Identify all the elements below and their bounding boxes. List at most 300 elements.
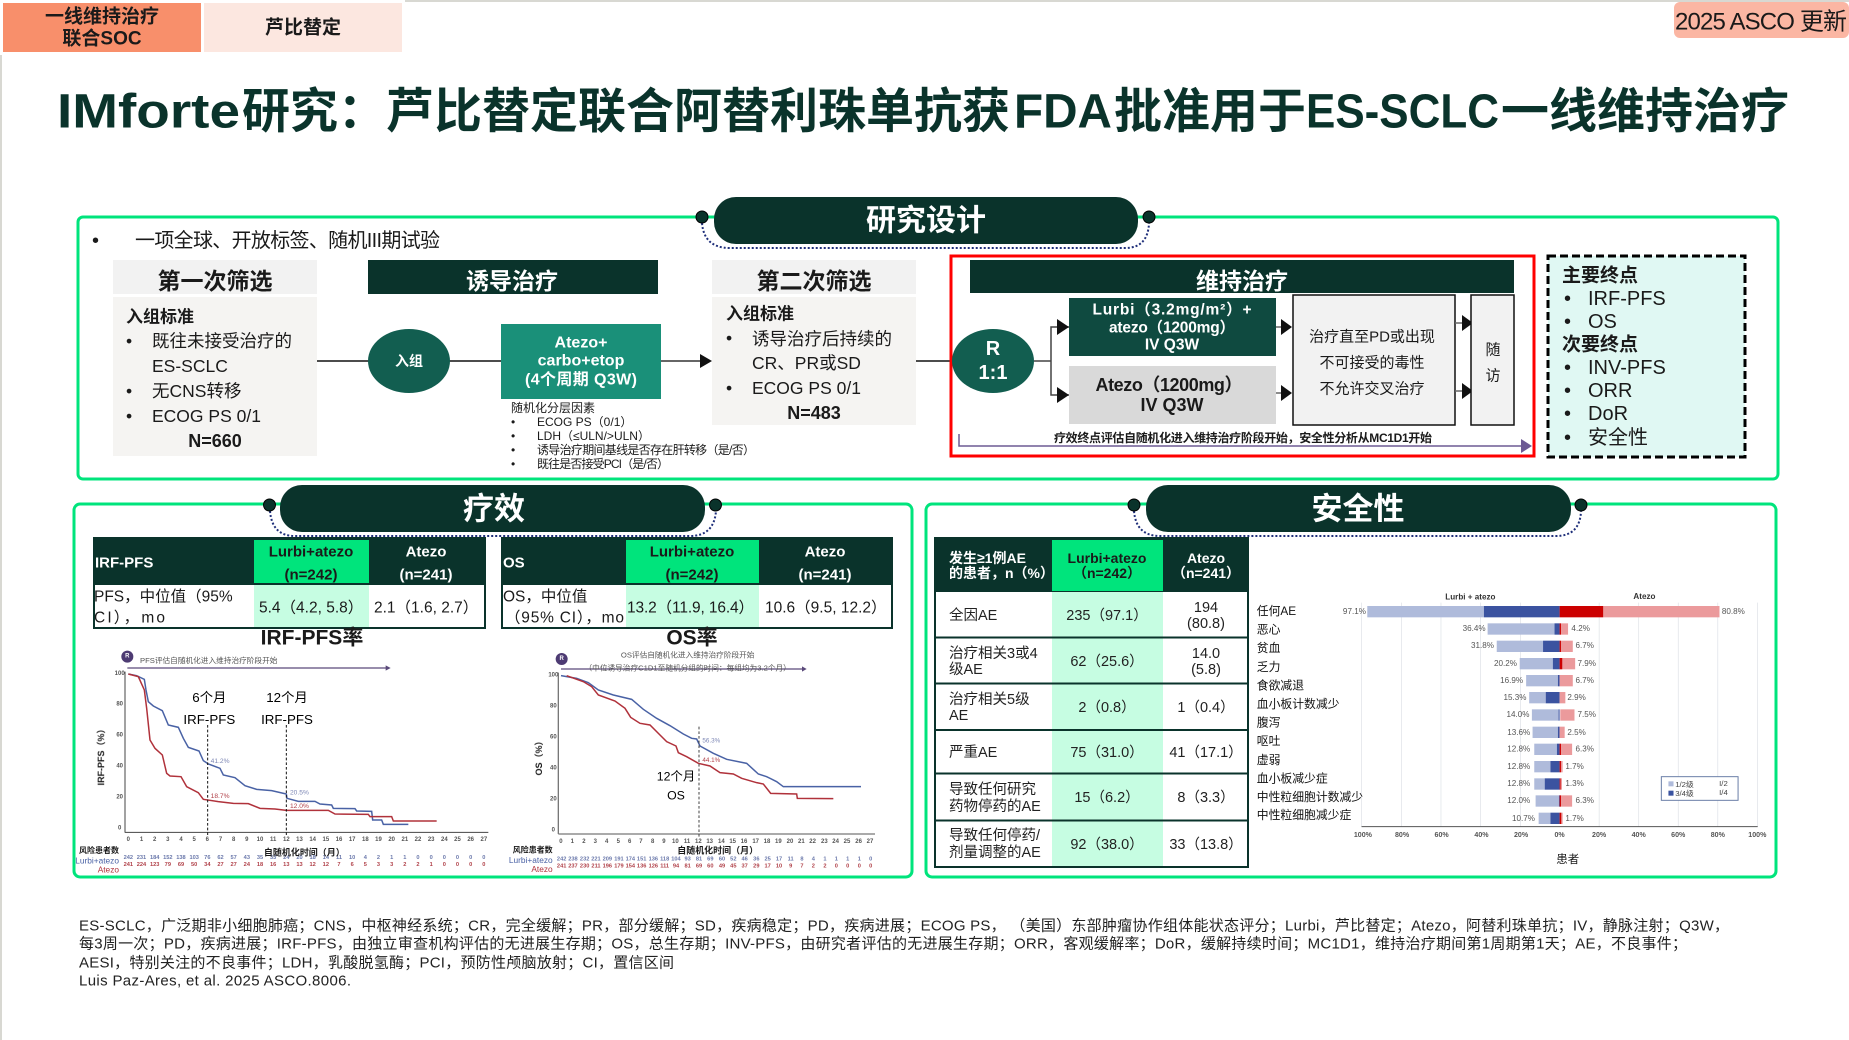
panel: endpoints: ORR (1588, 380, 1632, 402)
legend: grades: I/2 (1719, 779, 1728, 788)
chart: IRF-PFS Kaplan-Meier: 40 (116, 764, 124, 770)
chart: adverse event butterfly bars: 2.5% (1567, 728, 1586, 737)
block: lurbi plus atezo arm (1069, 298, 1276, 356)
text: stratification factors: • (511, 443, 515, 457)
chart: IRF-PFS Kaplan-Meier: 14 (323, 855, 330, 861)
chart: OS Kaplan-Meier: 自随机化时间（月） (677, 844, 758, 855)
block: treatment until progression: 不允许交叉治疗 (1319, 380, 1425, 398)
chart: OS Kaplan-Meier: 0 (869, 863, 872, 869)
table: adverse events: 194 (1194, 600, 1218, 616)
table: IRF-PFS: (n=242) (285, 566, 337, 584)
chart: OS Kaplan-Meier: 49 (719, 863, 725, 869)
heading: study design (714, 197, 1138, 244)
chart: IRF-PFS Kaplan-Meier: 22 (415, 837, 422, 843)
title: 批准用于 (1114, 86, 1306, 138)
chart: IRF-PFS Kaplan-Meier: 76 (204, 855, 210, 861)
chart: OS Kaplan-Meier: 3 (594, 839, 598, 845)
chart: OS Kaplan-Meier: 0 (552, 828, 556, 834)
chart: IRF-PFS Kaplan-Meier: 41.2% (211, 758, 230, 765)
panel: endpoints: 主要终点 (1562, 264, 1638, 286)
chart: adverse event butterfly bars: 7.5% (1578, 710, 1596, 719)
chart: OS Kaplan-Meier: 237 (568, 863, 578, 869)
chart: IRF-PFS Kaplan-Meier: R (125, 654, 130, 660)
chart: IRF-PFS Kaplan-Meier: 26 (467, 837, 475, 843)
chart: IRF-PFS Kaplan-Meier: 27 (231, 862, 237, 868)
panel: endpoints: • (1564, 311, 1571, 333)
chart: OS Kaplan-Meier: 4 (605, 839, 609, 845)
chart: OS Kaplan-Meier: 5 (617, 839, 621, 845)
chart: OS Kaplan-Meier: 20 (787, 839, 794, 845)
chart: adverse event butterfly bars: 12.8% (1507, 779, 1530, 788)
chart: IRF-PFS Kaplan-Meier: 0 (469, 855, 472, 861)
heading: safety (1146, 485, 1571, 532)
chart: OS Kaplan-Meier: 1 (571, 839, 575, 845)
block: first screening: 第一次筛选 (158, 268, 272, 294)
chart: adverse event butterfly bars: 6.7% (1575, 676, 1594, 685)
chart: adverse event butterfly bars: 12.8% (1507, 745, 1530, 753)
chart: IRF-PFS Kaplan-Meier: 18 (257, 862, 263, 868)
chart: adverse event butterfly bars: 呕吐 (1257, 735, 1281, 748)
chart: OS Kaplan-Meier: 0 (559, 839, 563, 845)
chart: IRF-PFS Kaplan-Meier: 18.7% (211, 793, 230, 800)
block: induction heading: 诱导治疗 (466, 268, 558, 294)
chart: IRF-PFS Kaplan-Meier: 7 (337, 862, 341, 868)
chart: adverse event butterfly bars (1257, 592, 1767, 866)
chart: adverse event butterfly bars: 100% (1354, 832, 1373, 839)
block: second screening (712, 260, 916, 425)
node: randomisation (952, 329, 1034, 393)
chart: OS Kaplan-Meier: 118 (660, 856, 669, 862)
chart: IRF-PFS Kaplan-Meier: 241 (124, 862, 133, 868)
chart: IRF-PFS Kaplan-Meier: 0 (416, 855, 420, 861)
table: OS: 13.2（11.9, 16.4） (627, 600, 754, 616)
chart: adverse event butterfly bars: 97.1% (1343, 607, 1366, 616)
chart: adverse event butterfly bars: 36.4% (1463, 624, 1486, 633)
block: first screening: 既往未接受治疗的 (152, 331, 292, 351)
table: adverse events: Lurbi+atezo (1068, 550, 1146, 566)
chart: OS Kaplan-Meier: 174 (626, 856, 636, 862)
table: adverse events: 41（17.1） (1169, 744, 1243, 761)
chart: IRF-PFS Kaplan-Meier: 27 (217, 862, 224, 868)
chart: OS Kaplan-Meier: 11 (788, 856, 794, 862)
chart: IRF-PFS Kaplan-Meier: 20.5% (290, 789, 309, 796)
chart: IRF-PFS Kaplan-Meier: PFS评估自随机化进入维持治疗阶段开始 (140, 655, 278, 665)
chart: IRF-PFS Kaplan-Meier: 13 (283, 862, 289, 868)
chart: IRF-PFS Kaplan-Meier: 12.0% (290, 803, 309, 810)
chart: IRF-PFS Kaplan-Meier: Atezo (98, 864, 119, 874)
table: adverse events: Atezo (1187, 550, 1225, 566)
chart: IRF-PFS Kaplan-Meier: IRF-PFS (261, 712, 313, 727)
chart: IRF-PFS Kaplan-Meier: 3 (390, 862, 393, 868)
block: follow-up (1471, 295, 1514, 425)
node: enrolment (368, 329, 450, 393)
chart: OS Kaplan-Meier: 18 (764, 839, 771, 845)
chart: OS Kaplan-Meier: （中位诱导治疗C1D1至随机分组的时间：每组均为3.2个月） (585, 662, 791, 672)
chart: IRF-PFS Kaplan-Meier: IRF-PFS（%） (96, 725, 106, 785)
chart: IRF-PFS Kaplan-Meier: 10 (349, 855, 355, 861)
table: adverse events: 1（0.4） (1177, 699, 1235, 716)
chart: adverse event butterfly bars: 40% (1474, 832, 1489, 839)
block: second screening: • (726, 378, 732, 398)
chart: IRF-PFS Kaplan-Meier: 0 (430, 855, 433, 861)
heading: study design: 研究设计 (866, 204, 986, 238)
chart: OS Kaplan-Meier: 12 (695, 839, 702, 845)
table: OS (502, 538, 892, 628)
footnotes: ES-SCLC，广泛期非小细胞肺癌；CNS，中枢神经系统；CR，完全缓解；PR，部分缓解；SD，疾病稳定；PD，疾病进展；ECOG PS， （美国）东部肿瘤协作组体能状态评分；Lurbi，芦比替定；Atezo，阿替利珠单抗；IV，静脉注射；Q3W， (79, 916, 1729, 934)
chart: IRF-PFS Kaplan-Meier: 100 (115, 671, 125, 677)
chart: adverse event butterfly bars: 1.3% (1565, 779, 1584, 788)
chart: IRF-PFS Kaplan-Meier: 138 (176, 855, 186, 861)
chart: OS Kaplan-Meier: 151 (637, 856, 646, 862)
chart: OS Kaplan-Meier: 26 (855, 839, 863, 845)
block: atezo arm: Atezo（1200mg） (1096, 375, 1242, 395)
chart: IRF-PFS Kaplan-Meier: 24 (441, 837, 448, 843)
chart: adverse event butterfly bars: 中性粒细胞计数减少 (1257, 790, 1363, 804)
tab: first-line maintenance with SOC: 联合SOC (62, 28, 142, 50)
panel: endpoints: 安全性 (1588, 426, 1648, 449)
arrows: randomisation branches (1034, 319, 1069, 403)
table: OS: OS (503, 554, 525, 572)
chart: IRF-PFS Kaplan-Meier: 13 (296, 862, 303, 868)
chart: IRF-PFS Kaplan-Meier: 3 (377, 862, 380, 868)
chart: OS Kaplan-Meier: 241 (557, 863, 566, 869)
chart: adverse event butterfly bars: 中性粒细胞减少症 (1257, 808, 1352, 822)
chart: IRF-PFS Kaplan-Meier: 18 (362, 837, 369, 843)
tab: lurbinectedin (204, 3, 402, 52)
chart: IRF-PFS Kaplan-Meier: 16 (336, 837, 343, 843)
block: second screening: 第二次筛选 (756, 268, 872, 294)
chart: OS Kaplan-Meier: 60 (719, 856, 725, 862)
chart: IRF-PFS Kaplan-Meier: 自随机化时间（月） (264, 847, 345, 858)
chart: IRF-PFS Kaplan-Meier: 80 (116, 702, 124, 708)
chart: IRF-PFS Kaplan-Meier: 14 (309, 837, 317, 843)
chart: OS Kaplan-Meier: 7 (639, 839, 643, 845)
chart: adverse event butterfly bars: 20% (1514, 832, 1529, 839)
table: OS: Atezo (805, 544, 845, 560)
chart: IRF-PFS Kaplan-Meier: 25 (454, 837, 461, 843)
chart: OS Kaplan-Meier: 12个月 (657, 769, 695, 783)
text: stratification factors: 既往是否接受PCI（是/否） (537, 456, 669, 471)
chart: IRF-PFS Kaplan-Meier: 2 (403, 862, 406, 868)
text: study description: 一项全球、开放标签、随机III期试验 (135, 229, 440, 252)
chart: OS Kaplan-Meier: 24 (832, 839, 840, 845)
block: first screening: ECOG PS 0/1 (152, 406, 261, 426)
chart: OS Kaplan-Meier: 4 (812, 856, 816, 862)
footnotes: 每3周一次；PD，疾病进展；IRF-PFS，由独立审查机构评估的无进展生存期；OS，总生存期；INV-PFS，由研究者评估的无进展生存期；ORR，客观缓解率；DoR，缓解持续时间；MC1D1，维持治疗期间第1周期第1天；AE，不良事件； (79, 934, 1687, 952)
chart: adverse event butterfly bars: 血小板计数减少 (1257, 697, 1340, 711)
block: first screening: N=660 (188, 431, 242, 451)
block: induction heading (368, 260, 658, 294)
block: first screening (113, 260, 317, 456)
chart: IRF-PFS Kaplan-Meier: 27 (480, 837, 488, 843)
chart: IRF-PFS Kaplan-Meier (75, 651, 488, 874)
chart: IRF-PFS Kaplan-Meier: 123 (150, 862, 159, 868)
flow line: enrolment (315, 360, 501, 362)
block: first screening: 入组标准 (126, 308, 194, 326)
tab: lurbinectedin: 芦比替定 (265, 16, 341, 38)
panel: efficacy (74, 485, 912, 877)
chart: IRF-PFS Kaplan-Meier: 2 (377, 855, 380, 861)
table: adverse events: 严重AE (949, 744, 998, 761)
block: induction regimen: Atezo+ (555, 334, 607, 352)
table: adverse events: 治疗相关5级 (949, 691, 1030, 708)
chart: IRF-PFS Kaplan-Meier: 24 (244, 862, 251, 868)
panel: safety (926, 485, 1776, 877)
chart: IRF-PFS Kaplan-Meier: 152 (163, 855, 173, 861)
chart: IRF-PFS Kaplan-Meier: 0 (456, 862, 459, 868)
chart: IRF-PFS Kaplan-Meier: 12个月 (266, 690, 308, 705)
chart: OS Kaplan-Meier: 16 (741, 839, 748, 845)
panel: endpoints: OS (1588, 311, 1617, 333)
chart: IRF-PFS Kaplan-Meier: 0 (127, 837, 131, 843)
chart: OS Kaplan-Meier: 14 (718, 839, 725, 845)
table: OS: （95% CI），mo (505, 610, 624, 626)
table: IRF-PFS: 2.1（1.6, 2.7） (374, 600, 478, 616)
chart: adverse event butterfly bars: 20.2% (1494, 659, 1517, 668)
chart: OS Kaplan-Meier: 23 (821, 839, 828, 845)
chart: IRF-PFS Kaplan-Meier: 5 (364, 862, 367, 868)
block: induction regimen: carbo+etop (538, 352, 625, 370)
chart: OS Kaplan-Meier: 10 (672, 839, 679, 845)
chart: IRF-PFS Kaplan-Meier: 9 (245, 837, 249, 843)
chart: OS Kaplan-Meier: 154 (626, 863, 636, 869)
chart: OS Kaplan-Meier: 36 (753, 856, 759, 862)
panel: endpoints: • (1564, 357, 1571, 379)
chart: OS Kaplan-Meier: 232 (580, 856, 589, 862)
chart: IRF-PFS Kaplan-Meier: 231 (137, 855, 146, 861)
chart: OS Kaplan-Meier: OS评估自随机化进入维持治疗阶段开始 (621, 649, 755, 659)
chart: IRF-PFS Kaplan-Meier: 23 (428, 837, 435, 843)
chart: IRF-PFS Kaplan-Meier: 3 (166, 837, 170, 843)
panel: study design (78, 197, 1778, 479)
chart: IRF-PFS Kaplan-Meier: 224 (137, 862, 147, 868)
tab: first-line maintenance with SOC (3, 3, 201, 52)
table: adverse events: 全因AE (949, 606, 998, 624)
chart: OS Kaplan-Meier: 9 (789, 863, 792, 869)
chart: OS Kaplan-Meier: 8 (800, 856, 804, 862)
block: treatment until progression: 治疗直至PD或出现 (1309, 328, 1435, 346)
chart: IRF-PFS Kaplan-Meier: 7 (219, 837, 223, 843)
chart: IRF-PFS Kaplan-Meier: 4 (364, 855, 368, 861)
chart: OS Kaplan-Meier: 93 (685, 856, 691, 862)
chart: IRF-PFS Kaplan-Meier: 10 (257, 837, 264, 843)
table: adverse events: 8（3.3） (1177, 789, 1235, 806)
chart: OS Kaplan-Meier: 242 (557, 856, 566, 862)
table: IRF-PFS: Lurbi+atezo (269, 544, 353, 560)
block: lurbi plus atezo arm: IV Q3W (1145, 336, 1199, 354)
chart: IRF-PFS Kaplan-Meier: 34 (204, 862, 211, 868)
table: adverse events: 62（25.6） (1070, 653, 1144, 670)
chart: IRF-PFS Kaplan-Meier: 1 (390, 855, 393, 861)
chart: OS Kaplan-Meier: 1 (823, 856, 827, 862)
chart: adverse event butterfly bars: 血小板减少症 (1257, 772, 1328, 785)
chart: OS Kaplan-Meier: 17 (776, 856, 782, 862)
node: randomisation: R (986, 338, 1001, 360)
table: adverse events: (80.8) (1187, 616, 1225, 632)
table: adverse events: 级AE (949, 661, 983, 678)
table: IRF-PFS: (n=241) (400, 566, 452, 584)
chart: OS Kaplan-Meier: 0 (869, 856, 872, 862)
chart: adverse event butterfly bars: 虚弱 (1257, 754, 1280, 767)
block: first screening: 无CNS转移 (152, 381, 241, 401)
chart: OS Kaplan-Meier: 0 (858, 863, 861, 869)
legend: grades (1661, 777, 1738, 800)
chart: OS Kaplan-Meier: 56.3% (702, 737, 721, 744)
title: ES-SCLC (1306, 86, 1499, 138)
chart: adverse event butterfly bars: 13.6% (1507, 728, 1530, 737)
chart: OS Kaplan-Meier: 211 (591, 863, 601, 869)
chart: OS Kaplan-Meier: 81 (685, 863, 691, 869)
chart: OS Kaplan-Meier: 191 (614, 856, 624, 862)
heading: safety: 安全性 (1312, 492, 1404, 526)
chart: IRF-PFS Kaplan-Meier: 20 (296, 855, 303, 861)
block: second screening: CR、PR或SD (752, 353, 861, 373)
chart: adverse event butterfly bars: 恶心 (1257, 624, 1281, 636)
chart: OS Kaplan-Meier (509, 649, 875, 874)
heading: OS rate: OS率 (666, 626, 718, 650)
chart: OS Kaplan-Meier: 179 (614, 863, 624, 869)
chart: adverse event butterfly bars: 乏力 (1257, 661, 1280, 674)
chart: adverse event butterfly bars: 60% (1671, 832, 1686, 839)
chart: adverse event butterfly bars: 食欲减退 (1257, 679, 1304, 692)
chart: IRF-PFS Kaplan-Meier: 13 (296, 837, 303, 843)
chart: IRF-PFS Kaplan-Meier: 风险患者数 (79, 845, 119, 855)
chart: OS Kaplan-Meier: 25 (765, 856, 771, 862)
table: adverse events: 的患者，n（%） (949, 565, 1054, 581)
chart: OS Kaplan-Meier: 81 (696, 856, 702, 862)
chart: IRF-PFS Kaplan-Meier: 33 (270, 855, 276, 861)
arrows: treatment to follow-up (1455, 315, 1473, 399)
chart: IRF-PFS Kaplan-Meier: 15 (322, 837, 330, 843)
panel: endpoints (1548, 256, 1745, 457)
block: lurbi plus atezo arm: Lurbi（3.2mg/m²）+ (1092, 302, 1252, 318)
table: adverse events: 导致任何停药/ (949, 827, 1041, 844)
text: stratification factors: 诱导治疗期间基线是否存在肝转移（是/否） (537, 442, 755, 457)
chart: OS Kaplan-Meier: OS (667, 789, 685, 803)
chart: OS Kaplan-Meier: 9 (662, 839, 666, 845)
badge: 2025 ASCO update: 2025 ASCO 更新 (1675, 8, 1847, 36)
chart: adverse event butterfly bars: 1.7% (1565, 762, 1584, 771)
chart: OS Kaplan-Meier: 126 (649, 863, 658, 869)
table: OS: (n=242) (666, 566, 718, 584)
block: first screening: • (126, 381, 132, 401)
chart: OS Kaplan-Meier: 1 (835, 856, 838, 862)
node: enrolment: 入组 (395, 353, 423, 369)
title: 研究：芦比替定联合阿替利珠单抗获 (242, 86, 1010, 138)
chart: OS Kaplan-Meier: 2 (823, 863, 827, 869)
chart: IRF-PFS Kaplan-Meier: 1 (430, 862, 433, 868)
chart: IRF-PFS Kaplan-Meier: 0 (456, 855, 459, 861)
chart: adverse event butterfly bars: 1.7% (1565, 814, 1584, 823)
chart: IRF-PFS Kaplan-Meier: 2 (416, 862, 420, 868)
chart: OS Kaplan-Meier: 136 (649, 856, 658, 862)
text: stratification factors: 随机化分层因素 (511, 400, 595, 415)
chart: OS Kaplan-Meier: 221 (591, 856, 601, 862)
table: adverse events: 14.0 (1192, 646, 1220, 662)
chart: OS Kaplan-Meier: R (560, 656, 565, 662)
chart: IRF-PFS Kaplan-Meier: 11 (336, 855, 342, 861)
table: adverse events: 药物停药的AE (949, 798, 1041, 815)
block: first screening: • (126, 331, 132, 351)
chart: OS Kaplan-Meier: 1 (858, 856, 861, 862)
heading: IRF-PFS rate: IRF-PFS率 (261, 626, 363, 650)
panel: endpoints: IRF-PFS (1588, 288, 1666, 310)
chart: adverse event butterfly bars: 12.8% (1507, 762, 1530, 771)
chart: OS Kaplan-Meier: 60 (707, 863, 713, 869)
text: stratification factors: • (511, 457, 515, 471)
chart: OS Kaplan-Meier: Lurbi+atezo (509, 855, 553, 865)
table: OS: OS，中位值 (503, 588, 587, 606)
chart: IRF-PFS Kaplan-Meier: 0 (469, 862, 472, 868)
heading: maintenance therapy: 维持治疗 (1196, 268, 1288, 294)
heading: maintenance therapy (970, 260, 1514, 294)
chart: OS Kaplan-Meier: 7 (800, 863, 804, 869)
chart: adverse event butterfly bars: 100% (1748, 832, 1767, 839)
chart: OS Kaplan-Meier: 0 (846, 863, 849, 869)
chart: OS Kaplan-Meier: 52 (730, 856, 736, 862)
chart: IRF-PFS Kaplan-Meier: 12 (310, 862, 316, 868)
chart: IRF-PFS Kaplan-Meier: 103 (189, 855, 199, 861)
chart: OS Kaplan-Meier: Atezo (531, 864, 553, 874)
title: 一线维持治疗 (1501, 86, 1789, 138)
chart: OS Kaplan-Meier: 0 (835, 863, 838, 869)
table: IRF-PFS: 5.4（4.2, 5.8） (259, 600, 363, 616)
table: adverse events: 235（97.1） (1066, 607, 1148, 624)
chart: OS Kaplan-Meier: 15 (729, 839, 737, 845)
table: IRF-PFS: Atezo (406, 544, 446, 560)
chart: adverse event butterfly bars: 7.9% (1578, 659, 1596, 668)
table: adverse events: 15（6.2） (1074, 789, 1140, 806)
chart: adverse event butterfly bars: 10.7% (1512, 814, 1535, 823)
block: second screening: ECOG PS 0/1 (752, 378, 861, 398)
chart: IRF-PFS Kaplan-Meier: 60 (116, 733, 124, 739)
chart: OS Kaplan-Meier: 6 (628, 839, 632, 845)
panel: endpoints: • (1564, 288, 1571, 310)
chart: adverse event butterfly bars: 患者 (1556, 853, 1579, 866)
heading: efficacy (280, 485, 705, 532)
chart: adverse event butterfly bars: 2.9% (1567, 693, 1586, 702)
text: stratification factors (511, 400, 755, 471)
chart: adverse event butterfly bars: 14.0% (1507, 710, 1530, 719)
text: stratification factors: ECOG PS（0/1） (537, 415, 632, 429)
chart: IRF-PFS Kaplan-Meier: 18 (310, 855, 316, 861)
chart: IRF-PFS Kaplan-Meier: 0 (443, 855, 446, 861)
chart: IRF-PFS Kaplan-Meier: 242 (124, 855, 133, 861)
block: induction regimen (501, 324, 661, 399)
chart: IRF-PFS Kaplan-Meier: 0 (443, 862, 446, 868)
table: adverse events: （n=241） (1172, 565, 1240, 581)
chart: IRF-PFS Kaplan-Meier: 43 (244, 855, 250, 861)
chart: IRF-PFS Kaplan-Meier: 12 (283, 837, 290, 843)
table: adverse events: 剂量调整的AE (949, 844, 1041, 861)
tab: first-line maintenance with SOC: 一线维持治疗 (45, 6, 159, 28)
table: adverse events: （n=242） (1073, 565, 1141, 581)
panel: endpoints: • (1564, 380, 1571, 402)
block: first screening: • (126, 406, 132, 426)
text: stratification factors: • (511, 415, 515, 429)
chart: adverse event butterfly bars: 15.3% (1503, 693, 1526, 702)
chart: adverse event butterfly bars: 4.2% (1571, 624, 1590, 633)
chart: OS Kaplan-Meier: 19 (775, 839, 782, 845)
arrow: induction to second screening (661, 354, 712, 368)
table: IRF-PFS: PFS，中位值（95% (94, 588, 233, 606)
chart: IRF-PFS Kaplan-Meier: 5 (192, 837, 196, 843)
table: OS: 10.6（9.5, 12.2） (765, 600, 886, 616)
chart: OS Kaplan-Meier: 230 (580, 863, 589, 869)
chart: IRF-PFS Kaplan-Meier: 62 (217, 855, 224, 861)
footnotes: AESI，特别关注的不良事件；LDH，乳酸脱氢酶；PCI，预防性颅脑放射；CI，置信区间 (79, 954, 674, 972)
node: randomisation: 1:1 (979, 362, 1007, 384)
